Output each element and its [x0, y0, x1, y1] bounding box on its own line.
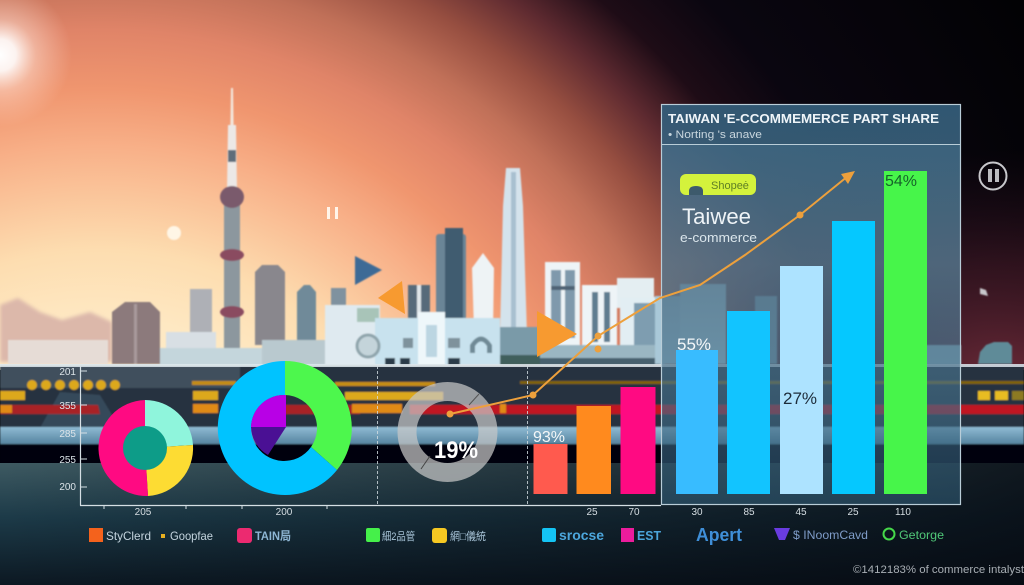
x axis labels: 45	[795, 507, 807, 518]
grey tower	[255, 265, 285, 345]
narrow tower	[331, 288, 346, 318]
y axis labels	[59, 367, 76, 493]
lower floor gradient	[0, 463, 1024, 585]
y axis labels: 200	[59, 482, 76, 493]
orange triangle right	[537, 311, 577, 357]
second white block	[582, 285, 617, 347]
white podium	[325, 305, 380, 365]
small bar chart	[533, 387, 656, 494]
value label: 19%	[434, 437, 478, 464]
value label 54: 54%	[885, 173, 917, 190]
y axis labels: 355	[59, 401, 76, 412]
legend: EST: EST	[637, 528, 661, 543]
third block	[617, 278, 654, 308]
x axis labels	[135, 507, 911, 518]
legend: Getorge: Getorge	[899, 528, 944, 542]
dark glass tower	[436, 234, 466, 324]
main broadcast tower	[220, 88, 244, 362]
legend: Apert: Apert	[696, 525, 742, 545]
tall white tower	[500, 168, 527, 335]
horizon line	[0, 364, 1024, 367]
y axis labels: 255	[59, 455, 76, 466]
heading: Taiwee: Taiwee	[682, 204, 751, 229]
legend: yellow item	[432, 528, 486, 543]
grey low block	[500, 327, 540, 363]
legend: green item: 細2品管	[382, 529, 415, 543]
blue triangle marker	[355, 256, 382, 285]
brown tower block	[112, 302, 160, 364]
background sky	[0, 0, 1024, 370]
shopee badge	[680, 174, 756, 195]
legend: srocse: srocse	[559, 527, 604, 543]
x axis labels: 110	[895, 507, 911, 518]
low city base	[160, 348, 660, 365]
low haze buildings left	[8, 340, 108, 364]
panel subtitle: • Norting 's anave	[668, 129, 762, 141]
value label: 93%	[533, 429, 565, 446]
small moon	[167, 226, 181, 240]
low white block left	[166, 332, 216, 364]
upper deck	[0, 366, 1024, 428]
pause button	[980, 162, 1006, 190]
legend: Goopfae: Goopfae	[170, 529, 213, 543]
white spire block	[472, 253, 494, 330]
value label 55: 55%	[677, 335, 711, 354]
legend: green item	[366, 528, 415, 543]
panel header	[662, 105, 960, 144]
trend line arrow	[446, 171, 855, 418]
y axis labels: 201	[59, 367, 76, 378]
buildings behind the panel	[655, 296, 695, 364]
legend: yellow item: 網□儀統	[450, 529, 486, 543]
y axis labels: 285	[59, 429, 76, 440]
panel: market share card	[662, 104, 960, 504]
x axis labels: 70	[628, 507, 640, 518]
skyline	[0, 88, 1012, 365]
shopee badge: Shopeė	[711, 180, 749, 192]
x axis labels: 25	[847, 507, 859, 518]
transit band	[0, 366, 1024, 464]
x axis labels: 30	[691, 507, 703, 518]
mountains	[0, 298, 112, 362]
light blue pipe	[0, 427, 1024, 444]
donut chart: small	[98, 400, 193, 496]
main bar chart	[676, 171, 927, 494]
x axis labels: 25	[586, 507, 598, 518]
amber strips	[192, 381, 1024, 386]
amber lights	[0, 380, 1024, 400]
legend: NoomCavd: $ INoomCavd	[793, 528, 868, 542]
panel title: TAIWAN 'E-CCOMMEMERCE PART SHARE	[668, 111, 939, 126]
x axis labels: 200	[276, 507, 293, 518]
legend: StyClerd	[89, 528, 151, 543]
donut chart: 19 percent	[407, 392, 488, 472]
footer credit: ©1412183% of commerce intalyst	[853, 564, 1024, 576]
legend: StyClerd: StyClerd	[106, 529, 151, 543]
x axis labels: 85	[743, 507, 755, 518]
legend: TAIN: TAIN局	[255, 529, 291, 543]
legend: TAIN	[237, 528, 291, 543]
heading: e-commerce: e-commerce	[680, 230, 757, 245]
legend: EST	[621, 528, 661, 543]
teal tower	[297, 285, 316, 352]
axes frame	[80, 366, 661, 509]
small buildings right	[978, 342, 1012, 364]
white block	[545, 262, 580, 347]
orange triangle left	[378, 281, 405, 314]
x axis labels: 205	[135, 507, 152, 518]
short dark block	[408, 285, 430, 319]
maroon glow on the right	[640, 150, 1024, 370]
pause mark in sky	[327, 207, 338, 219]
pale office block	[190, 289, 212, 339]
red stripe	[0, 405, 1024, 414]
donut chart: large	[218, 361, 352, 495]
legend	[89, 525, 944, 545]
sun glare	[0, 0, 72, 127]
ornate civic building	[357, 312, 500, 365]
value label 27: 27%	[783, 389, 817, 408]
black strip	[0, 444, 1024, 464]
